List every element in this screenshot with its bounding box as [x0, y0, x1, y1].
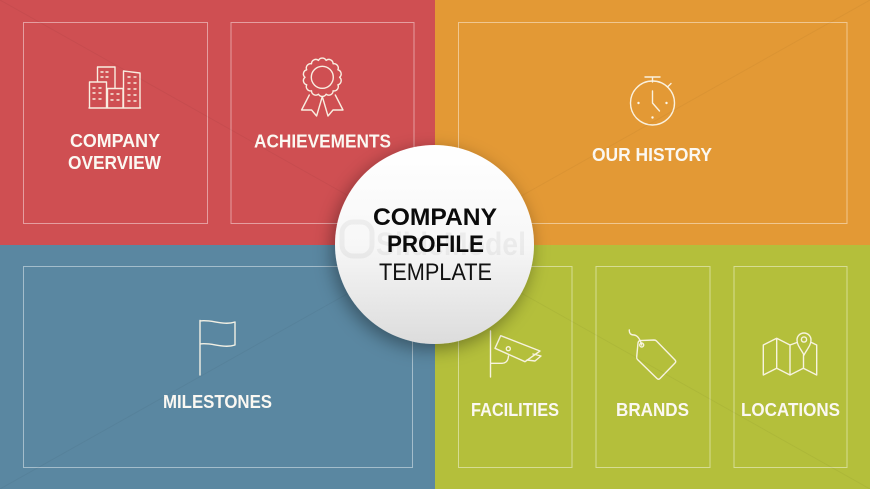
watermark — [342, 222, 526, 262]
panel: company overview and achievements — [0, 0, 435, 245]
title: company profile template: PROFILE — [387, 231, 484, 258]
icon: stopwatch — [630, 77, 674, 125]
label: company overview: OVERVIEW — [68, 153, 161, 173]
label: facilities: FACILITIES — [471, 400, 559, 420]
title: company profile template: COMPANY — [373, 204, 497, 231]
panel: milestones — [0, 245, 435, 489]
label: achievements: ACHIEVEMENTS — [254, 132, 391, 152]
icon: buildings — [89, 67, 140, 108]
label: company overview — [68, 131, 161, 173]
title: company profile template — [373, 204, 497, 286]
watermark: SlideModel — [376, 226, 526, 262]
icon: security camera — [490, 331, 541, 377]
label: our history: OUR HISTORY — [592, 145, 712, 165]
label: locations: LOCATIONS — [741, 400, 840, 420]
icon: folded map with pin — [763, 333, 817, 375]
panel: our history — [435, 0, 870, 245]
label: company overview: COMPANY — [70, 131, 160, 151]
label: milestones: MILESTONES — [163, 392, 272, 412]
icon: price tag — [629, 330, 676, 379]
center circle badge — [335, 145, 534, 344]
title: company profile template: TEMPLATE — [379, 259, 492, 286]
icon: award rosette — [302, 58, 343, 116]
icon: flag — [200, 320, 235, 375]
label: brands: BRANDS — [616, 400, 689, 420]
panel: facilities, brands and locations — [435, 245, 870, 489]
